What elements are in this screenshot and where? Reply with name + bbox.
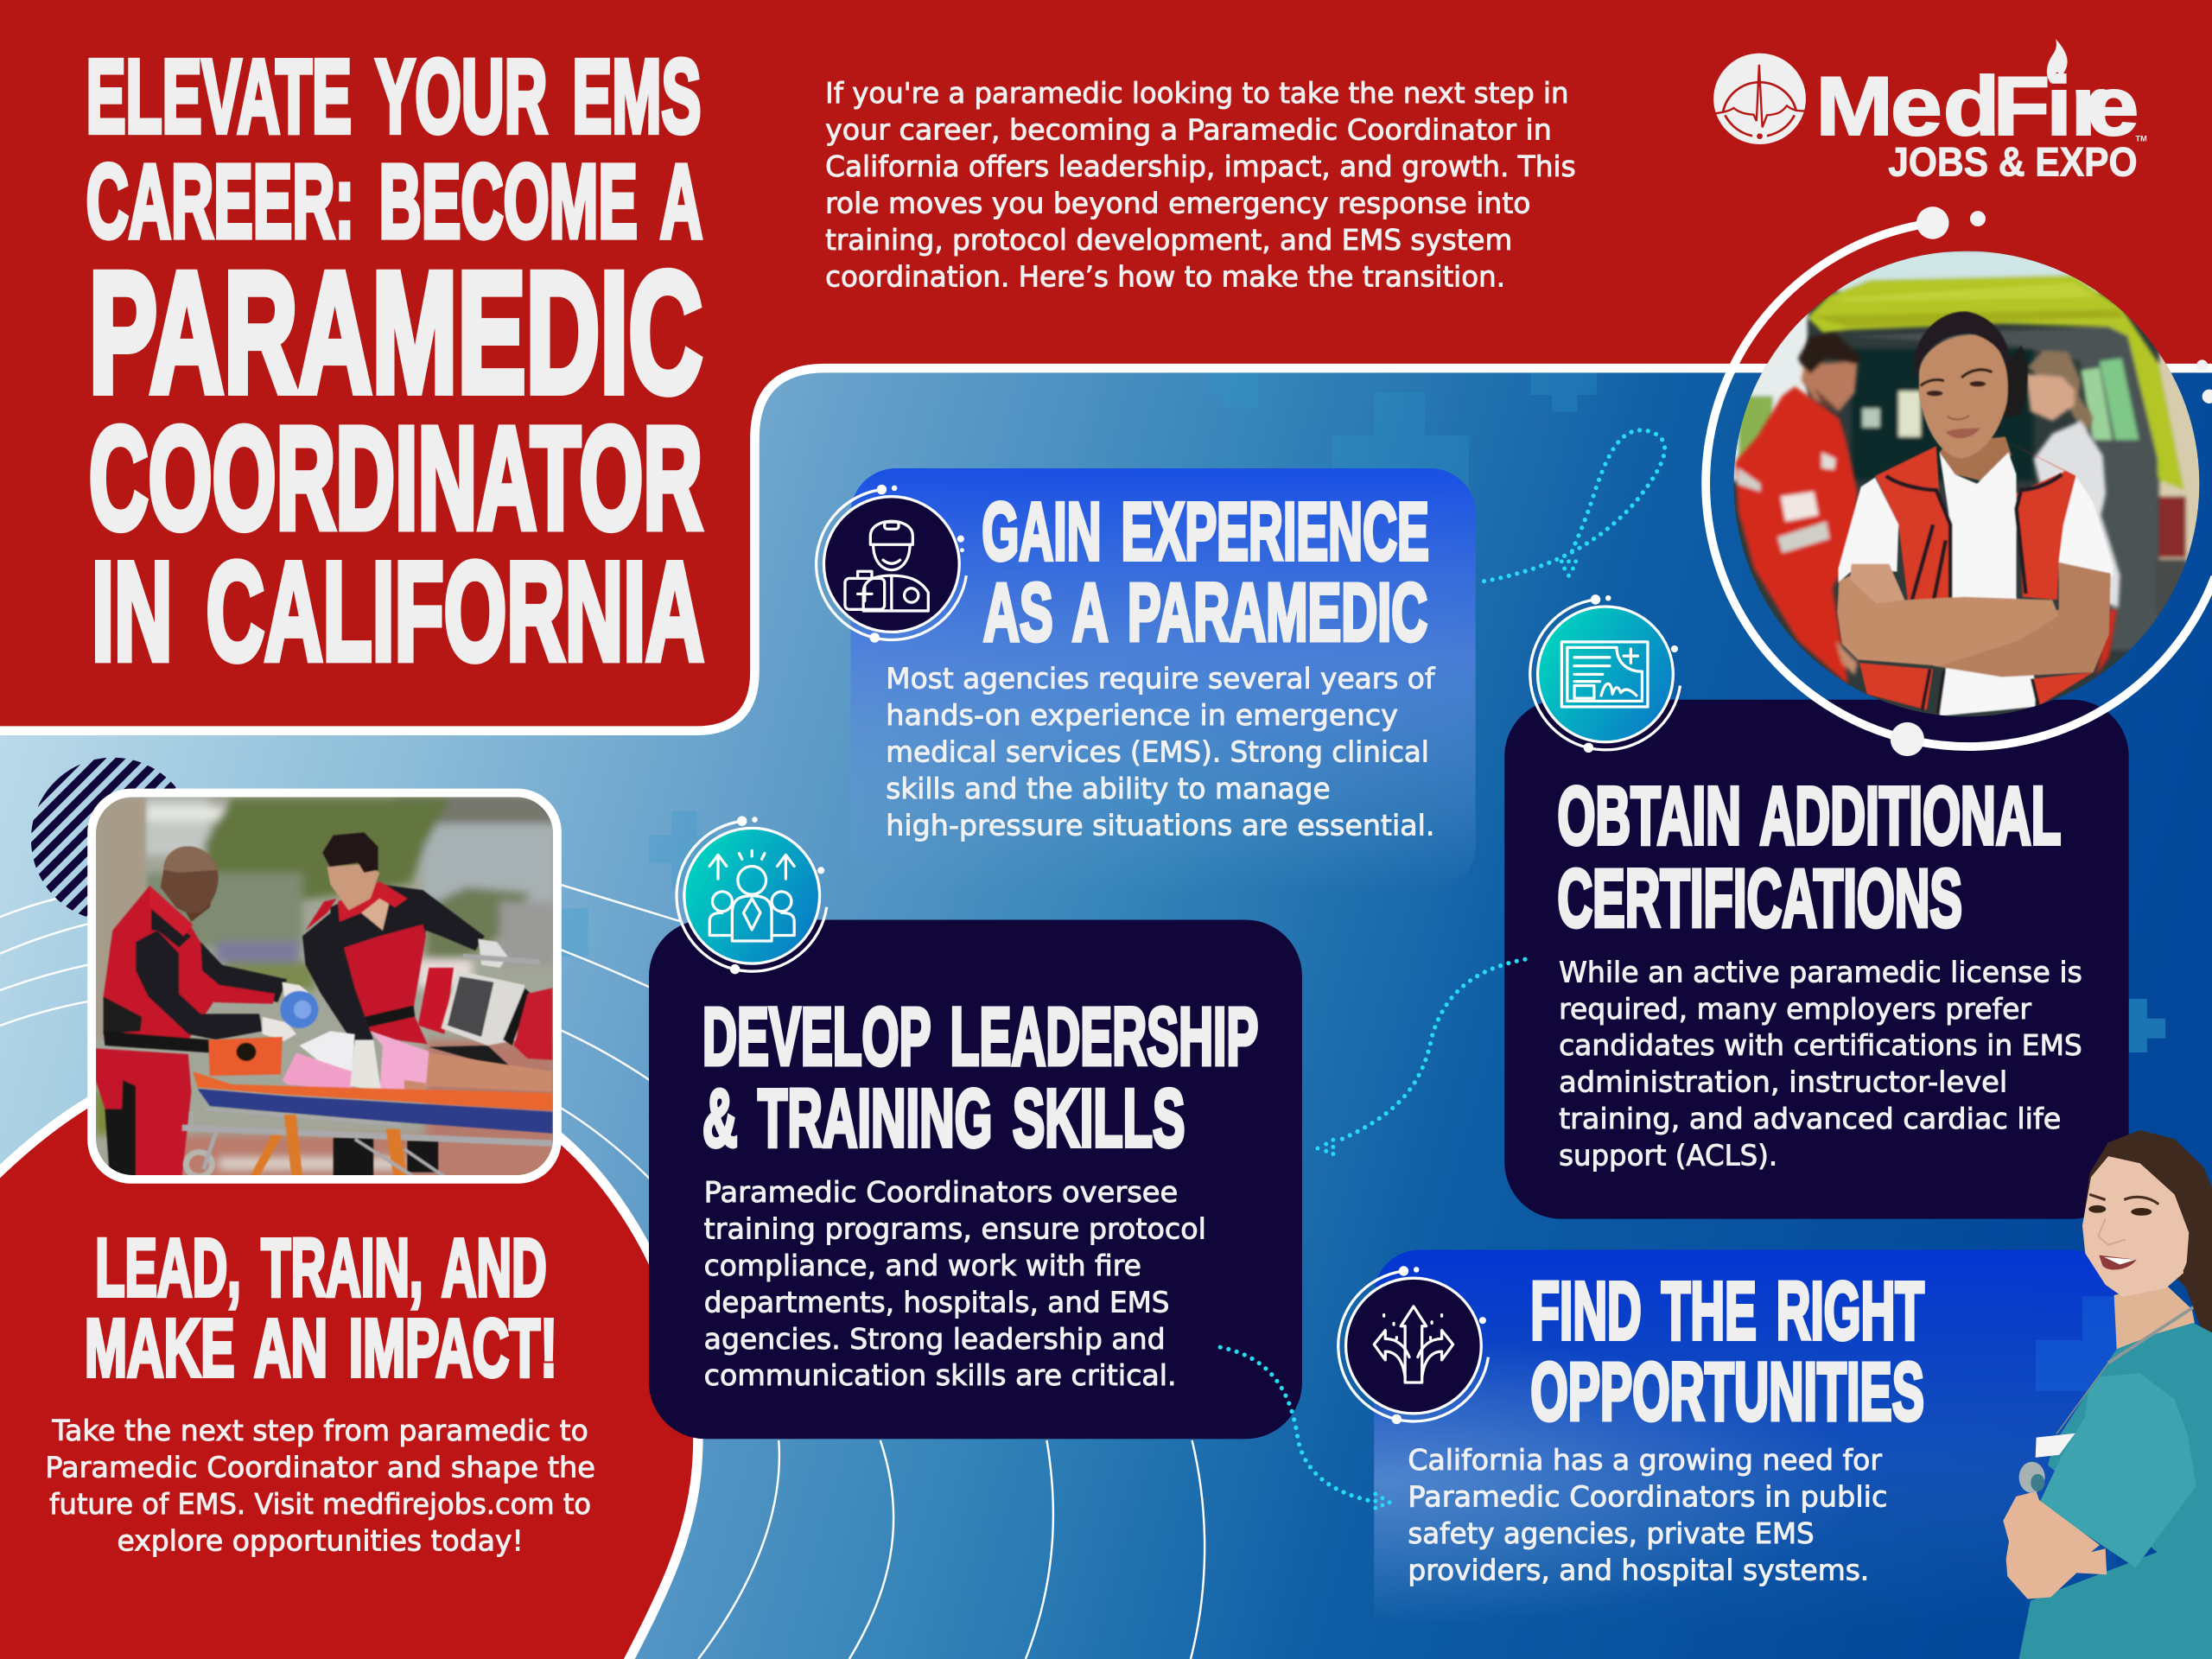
text: leadership body: agencies. Strong leadership and [704, 1323, 1166, 1356]
sub: blurred background [94, 795, 556, 1181]
text: gain experience body: high-pressure situations are essential. [886, 810, 1434, 842]
heading: opportunities: OPPORTUNITIES [1530, 1346, 1924, 1438]
heading: gain experience [982, 486, 1429, 658]
panel: obtain additional certifications [1504, 700, 2129, 1219]
text: call to action: Paramedic Coordinator and shape the [45, 1451, 595, 1484]
icon: paramedic [817, 485, 966, 643]
text: certifications body: support (ACLS). [1559, 1140, 1777, 1173]
main title: ELEVATE YOUR EMS [86, 38, 701, 155]
text: call to action: Take the next step from paramedic to [51, 1414, 588, 1447]
photo: smiling nurse in teal scrubs [2003, 1130, 2212, 1659]
heading: lead train and make an impact: LEAD, TRAIN, AND [95, 1223, 547, 1314]
heading: leadership: DEVELOP LEADERSHIP [702, 991, 1258, 1083]
intro paragraph: role moves you beyond emergency response into [825, 188, 1530, 220]
arrow: gain experience to certifications [1484, 430, 1665, 582]
text: leadership body: departments, hospitals, and EMS [704, 1286, 1169, 1319]
arrow: certifications to leadership [1315, 959, 1525, 1156]
sub: left paramedic [96, 846, 319, 1177]
intro paragraph: If you're a paramedic looking to take the next step in [825, 77, 1569, 110]
logo: MedFire Jobs & Expo: MedFire [1815, 59, 2139, 153]
text: call to action [45, 1414, 595, 1557]
text: opportunities body: California has a growing need for [1408, 1444, 1883, 1477]
sub: man in red jacket [1735, 333, 1861, 685]
sub: blonde colleague [2025, 350, 2120, 676]
main title: COORDINATOR [89, 397, 702, 559]
text: gain experience body: hands-on experience in emergency [886, 699, 1398, 732]
heading: certifications [1557, 770, 2061, 944]
text: call to action: future of EMS. Visit medfirejobs.com to [49, 1488, 591, 1521]
heading: lead train and make an impact: MAKE AN IMPACT! [85, 1303, 557, 1395]
logo: MedFire Jobs & Expo: JOBS & EXPO [1888, 140, 2138, 186]
heading: leadership [702, 991, 1258, 1165]
big circular photo: paramedics by ambulance [1732, 250, 2203, 721]
panel: develop leadership and training skills [649, 919, 1302, 1439]
panel: find the right opportunities [1374, 1250, 2120, 1628]
text: leadership body: Paramedic Coordinators oversee [704, 1176, 1178, 1209]
text: certifications body [1559, 956, 2082, 1173]
text: certifications body: required, many employers prefer [1559, 993, 2032, 1026]
text: gain experience body: medical services (EMS). Strong clinical [886, 736, 1429, 769]
bottom-left red rounded panel [0, 1044, 698, 1659]
text: opportunities body: Paramedic Coordinators in public [1408, 1481, 1887, 1514]
text: certifications body: training, and advanced cardiac life [1559, 1103, 2061, 1135]
text: certifications body: administration, instructor-level [1559, 1066, 2007, 1099]
heading: gain experience: GAIN EXPERIENCE [982, 486, 1429, 577]
heading: opportunities: FIND THE RIGHT [1530, 1265, 1924, 1357]
striped navy circle [31, 757, 176, 917]
logo: MedFire Jobs & Expo: TM [2136, 134, 2147, 143]
intro paragraph: coordination. Here’s how to make the transition. [825, 260, 1505, 293]
text: leadership body [704, 1176, 1206, 1392]
white ring around photo with nodes [1706, 207, 2212, 756]
text: opportunities body: safety agencies, private EMS [1408, 1517, 1815, 1550]
text: gain experience body: skills and the ability to manage [886, 772, 1331, 805]
heading: opportunities [1530, 1265, 1924, 1438]
icon: team leader [677, 816, 827, 974]
heading: gain experience: AS A PARAMEDIC [983, 567, 1427, 658]
photo: paramedics treating patient [87, 789, 562, 1184]
main title: CAREER: BECOME A [86, 143, 702, 259]
text: leadership body: compliance, and work with fire [704, 1249, 1141, 1282]
text: leadership body: training programs, ensure protocol [704, 1212, 1206, 1245]
text: leadership body: communication skills are critical. [704, 1359, 1177, 1392]
intro paragraph [825, 77, 1576, 293]
heading: lead train and make an impact [85, 1223, 557, 1395]
main title [86, 38, 704, 690]
arrow: leadership to opportunities [1220, 1347, 1392, 1510]
top red panel with white outline [0, 0, 2212, 731]
sub: right paramedic [302, 832, 508, 1177]
text: call to action: explore opportunities today! [118, 1524, 524, 1557]
main title: IN CALIFORNIA [92, 534, 704, 690]
intro paragraph: California offers leadership, impact, and growth. This [825, 150, 1576, 183]
sub: monitor and bag [418, 957, 552, 1069]
intro paragraph: your career, becoming a Paramedic Coordinator in [825, 114, 1552, 147]
text: opportunities body [1408, 1444, 1887, 1587]
main title: PARAMEDIC [89, 238, 702, 429]
text: gain experience body [886, 663, 1436, 842]
text: certifications body: While an active paramedic license is [1559, 956, 2082, 988]
logo: MedFire Jobs & Expo [1713, 39, 2147, 186]
text: opportunities body: providers, and hospital systems. [1408, 1554, 1869, 1587]
intro paragraph: training, protocol development, and EMS system [825, 224, 1512, 257]
background medical crosses [560, 372, 2165, 1052]
text: gain experience body: Most agencies require several years of [886, 663, 1436, 696]
icon: branching arrows [1338, 1266, 1488, 1424]
text: certifications body: candidates with certifications in EMS [1559, 1029, 2082, 1062]
decorative concentric white arcs [0, 885, 1205, 1659]
heading: leadership: & TRAINING SKILLS [702, 1073, 1185, 1165]
sub: patient and stretcher [182, 1031, 552, 1177]
sub: woman with red vest [1837, 312, 2113, 716]
icon: certificate [1530, 594, 1680, 753]
panel: gain experience [817, 468, 1476, 892]
